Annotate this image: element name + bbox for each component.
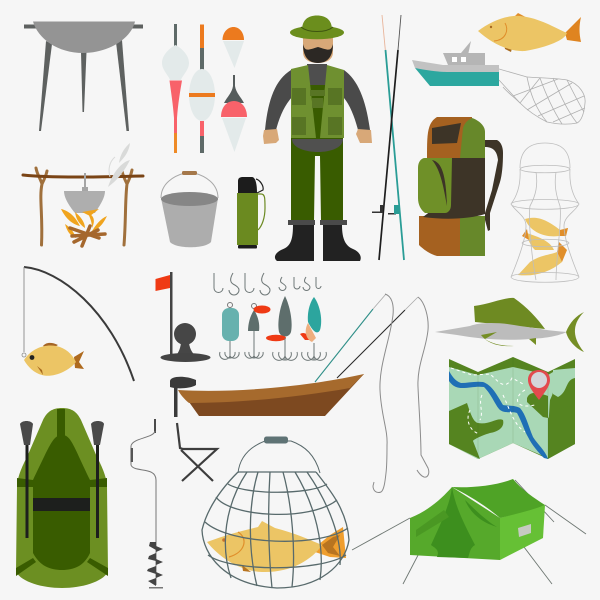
- fisherman boots: [275, 220, 361, 261]
- icon: backpack: [418, 117, 503, 256]
- icon: ice auger: [130, 419, 163, 588]
- icon: thermos: [237, 177, 265, 248]
- icon: landing net: [499, 69, 585, 124]
- net fish: [518, 218, 568, 275]
- fisherman vest: [291, 65, 344, 138]
- fisherman hat: [290, 16, 344, 39]
- icon: keep net with fish: [511, 143, 579, 282]
- icon: fish hooks: [214, 273, 321, 295]
- icon: fishing floats: [162, 24, 247, 153]
- trapped fish: [207, 521, 346, 572]
- icon: green tent: [352, 479, 586, 584]
- fisherman figure: [263, 16, 372, 261]
- fisherman shirt: [307, 64, 327, 88]
- fisherman head: [303, 36, 333, 63]
- icon: campfire with pot: [23, 143, 143, 246]
- icon: motor boat: [412, 41, 499, 86]
- icon: wooden boat with motor and rods: [170, 294, 429, 493]
- icon: rod with caught fish: [22, 267, 134, 381]
- icon: bucket: [161, 171, 218, 247]
- icon: folding chair: [177, 423, 217, 481]
- fisherman left arm and hand: [265, 70, 292, 130]
- icon: fishing lures: [220, 296, 326, 360]
- fisherman belt: [292, 139, 343, 152]
- fisherman right arm and hand: [344, 70, 370, 130]
- icon: sailfish: [435, 298, 584, 352]
- icon: yellow fish: [478, 13, 581, 52]
- icon: ice fishing tip-up: [156, 272, 210, 362]
- icon: round fish trap: [202, 436, 349, 588]
- icon: cauldron on tripod: [24, 22, 143, 131]
- fisherman trousers: [291, 138, 343, 221]
- icon: inflatable rubber boat: [16, 408, 108, 588]
- icon: folded map with pin: [449, 357, 575, 459]
- icon: crossed fishing rods: [372, 15, 404, 260]
